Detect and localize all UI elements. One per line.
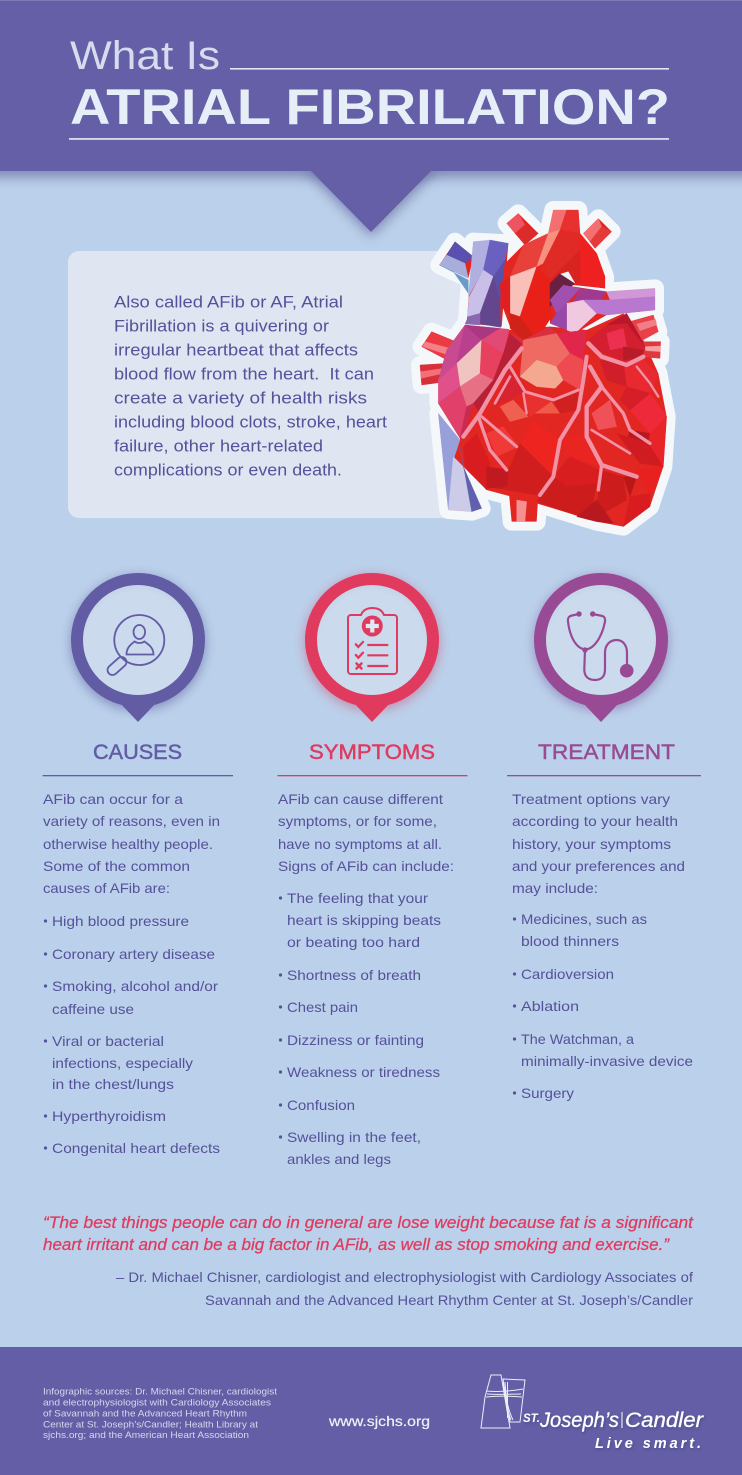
intro panel: irregular heartbeat that affects (114, 342, 358, 360)
text: treatment list: history, your symptoms (512, 836, 671, 852)
text: treatment list: Treatment options vary (512, 791, 670, 807)
text: symptoms list: Signs of AFib can include: (278, 858, 454, 874)
intro panel: blood flow from the heart. It can (114, 366, 374, 384)
callout: quote (43, 1214, 694, 1254)
text: symptoms list: ankles and legs (287, 1151, 391, 1167)
logo: Candler (625, 1409, 704, 1432)
callout: quote: heart irritant and can be a big factor in AFib, as well as stop smoking and exercise.” (43, 1236, 671, 1254)
text: treatment list: minimally-invasive device (521, 1053, 693, 1069)
text: symptoms list: symptoms, or for some, (278, 813, 437, 829)
header banner (0, 0, 742, 236)
text: causes list: infections, especially (52, 1055, 193, 1071)
intro panel: Fibrillation is a quivering or (114, 318, 330, 336)
intro panel: complications or even death. (114, 462, 342, 480)
logo: ST. (523, 1413, 540, 1425)
text: attribution (116, 1269, 693, 1308)
text: attribution: Savannah and the Advanced Heart Rhythm Center at St. Joseph’s/Candler (205, 1292, 693, 1308)
text: treatment list: The Watchman, a (521, 1031, 634, 1047)
intro panel: including blood clots, stroke, heart (114, 414, 387, 432)
text: symptoms list: or beating too hard (287, 934, 420, 950)
text: causes list: AFib can occur for a (43, 791, 183, 807)
text: sources: of Savannah and the Advanced Heart Rhythm (43, 1408, 247, 1420)
heading: symptoms: SYMPTOMS (309, 741, 435, 764)
text: treatment list: and your preferences and (512, 858, 685, 874)
text: treatment list: according to your health (512, 813, 678, 829)
intro panel: create a variety of health risks (114, 390, 367, 408)
text: sources (43, 1386, 277, 1441)
text: symptoms list: AFib can cause different (278, 791, 443, 807)
text: treatment list: Surgery (521, 1085, 574, 1101)
text: causes list: caffeine use (52, 1001, 134, 1017)
title: ATRIAL FIBRILATION? (70, 78, 670, 135)
text: treatment list: blood thinners (521, 933, 619, 949)
logo: Live smart. (595, 1436, 701, 1452)
panel: symptoms (278, 575, 468, 1167)
text: sources: Center at St. Joseph’s/Candler; Health Library at (43, 1420, 258, 1430)
text: causes list: Hyperthyroidism (52, 1108, 166, 1124)
text: causes list: causes of AFib are: (43, 880, 170, 896)
text: treatment list: Medicines, such as (521, 911, 647, 927)
text: sources: sjchs.org; and the American Heart Association (43, 1430, 249, 1441)
title: What Is (70, 34, 220, 78)
panel: causes (42, 575, 233, 1156)
callout: quote: “The best things people can do in general are lose weight because fat is a significant (43, 1214, 694, 1232)
panel: treatment (507, 575, 701, 1101)
text: symptoms list: Chest pain (287, 999, 358, 1015)
text: symptoms list: The feeling that your (287, 890, 428, 906)
text: symptoms list: Shortness of breath (287, 967, 421, 983)
text: causes list: in the chest/lungs (52, 1076, 174, 1092)
text: sources: and electrophysiologist with Cardiology Associates (43, 1398, 271, 1408)
intro panel: failure, other heart-related (114, 438, 323, 456)
intro panel: Also called AFib or AF, Atrial (114, 294, 343, 312)
text: causes list: Coronary artery disease (52, 946, 215, 962)
footer band (0, 1347, 742, 1475)
logo: Joseph’s (539, 1409, 619, 1432)
text: causes list: High blood pressure (52, 913, 189, 929)
text: symptoms list (278, 791, 454, 1167)
heading: causes: CAUSES (93, 741, 182, 764)
icon: low-poly heart (420, 210, 667, 527)
text: causes list: Congenital heart defects (52, 1140, 220, 1156)
text: causes list: Smoking, alcohol and/or (52, 978, 218, 994)
text: symptoms list: have no symptoms at all. (278, 836, 442, 852)
icon: pin with magnifier (70, 575, 206, 722)
icon: pin with stethoscope (533, 575, 669, 722)
text: symptoms list: Dizziness or fainting (287, 1032, 424, 1048)
text: causes list: Viral or bacterial (52, 1033, 164, 1049)
title (69, 34, 670, 140)
text: treatment list: Ablation (521, 998, 579, 1014)
text: causes list: Some of the common (43, 858, 190, 874)
text: symptoms list: Confusion (287, 1097, 355, 1113)
text: treatment list (512, 791, 693, 1101)
text: website: www.sjchs.org (328, 1414, 430, 1429)
text: symptoms list: Swelling in the feet, (287, 1129, 421, 1145)
text: symptoms list: heart is skipping beats (287, 912, 441, 928)
text: treatment list: may include: (512, 880, 598, 896)
text: treatment list: Cardioversion (521, 966, 614, 982)
icon: pin with clipboard (304, 575, 440, 722)
text: causes list (43, 791, 220, 1156)
intro panel (68, 251, 468, 518)
heading: treatment: TREATMENT (538, 741, 675, 764)
text: causes list: otherwise healthy people. (43, 836, 213, 852)
logo (481, 1375, 704, 1452)
text: attribution: – Dr. Michael Chisner, cardiologist and electrophysiologist with Cardiology Associates of (116, 1269, 693, 1285)
text: causes list: variety of reasons, even in (43, 813, 220, 829)
text: sources: Infographic sources: Dr. Michael Chisner, cardiologist (43, 1386, 277, 1398)
text: symptoms list: Weakness or tiredness (287, 1064, 440, 1080)
